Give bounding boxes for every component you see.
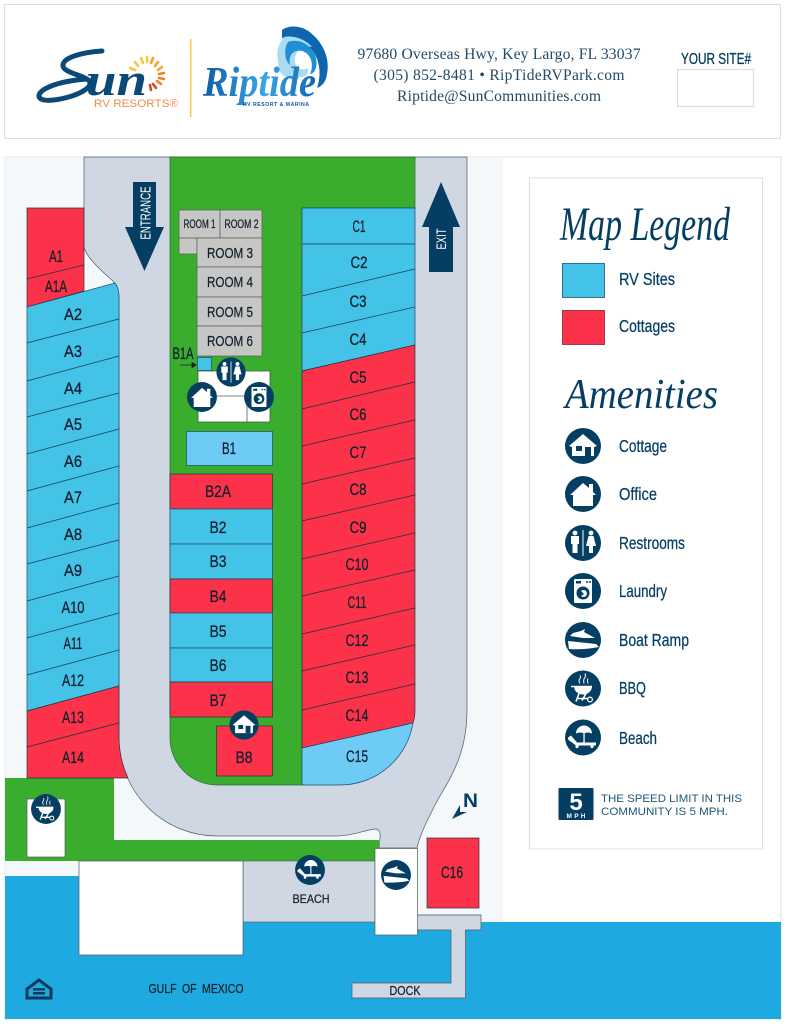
icon: boat ramp [381, 860, 411, 890]
amenity: beach: Beach [619, 728, 657, 748]
site B1A with arrow [172, 344, 212, 370]
site C1: C1 [352, 217, 366, 236]
site C16 [427, 838, 479, 908]
site B7: B7 [210, 691, 226, 710]
site A6 [27, 429, 119, 491]
boat ramp [375, 848, 418, 935]
icon: BBQ [31, 794, 61, 824]
room 1: ROOM 1 [184, 219, 216, 231]
legend panel [530, 178, 762, 849]
site B4 [170, 579, 272, 613]
speed limit notice: 5 [569, 789, 583, 816]
site C10: C10 [346, 555, 368, 574]
site A3 [27, 319, 119, 381]
amenities heading: Amenities [562, 372, 718, 418]
address block: Riptide@SunCommunities.com [397, 88, 601, 105]
amenity: laundry: Laundry [619, 581, 667, 601]
address block: (305) 852-8481 • RipTideRVPark.com [374, 67, 624, 84]
amenity: restrooms: Restrooms [619, 533, 685, 553]
room 6 [197, 326, 262, 356]
speed limit notice: MPH [566, 813, 586, 820]
speed limit notice [558, 788, 742, 820]
green space [5, 157, 415, 861]
site A1A: A1A [45, 277, 67, 296]
site B8 [216, 726, 272, 776]
amenity: BBQ [565, 670, 646, 706]
site B6: B6 [210, 656, 226, 675]
site A13 [27, 686, 119, 747]
site B5 [170, 613, 272, 648]
gulf label: GULF OF MEXICO [148, 982, 244, 996]
site B7 [170, 682, 272, 717]
Sun RV Resorts logo [39, 51, 178, 110]
BBQ area [27, 794, 65, 857]
site C3 [302, 269, 415, 333]
your site number box [678, 51, 754, 106]
site A10 [27, 576, 119, 638]
logo divider [190, 39, 191, 117]
amenity: beach [565, 720, 657, 756]
site C4 [302, 307, 415, 371]
amenity: office [565, 476, 657, 512]
room 6: ROOM 6 [207, 333, 253, 350]
site A9: A9 [64, 561, 82, 580]
room 4 [197, 267, 262, 297]
beach [243, 861, 375, 922]
entrance arrow: ENTRANCE [138, 186, 154, 239]
site C7: C7 [350, 443, 366, 462]
site B6 [170, 648, 272, 682]
section B sites [170, 432, 272, 776]
site A13: A13 [62, 708, 84, 727]
site C2: C2 [350, 253, 368, 272]
speed limit notice: THE SPEED LIMIT IN THIS [601, 793, 742, 805]
icon: cottage on B8 [229, 710, 259, 740]
site B2 [170, 509, 272, 544]
icon: laundry [244, 382, 274, 412]
room 5: ROOM 5 [207, 304, 253, 321]
entrance arrow [125, 182, 164, 271]
site C8 [302, 458, 415, 521]
icon: equal housing [27, 980, 51, 998]
Sun RV Resorts logo: un [86, 54, 147, 105]
road [84, 157, 467, 848]
north arrow [452, 791, 478, 819]
site A10: A10 [62, 598, 84, 617]
site A6: A6 [64, 452, 82, 471]
room 2: ROOM 2 [224, 219, 258, 231]
speed limit notice: COMMUNITY IS 5 MPH. [601, 806, 728, 818]
white lot [79, 861, 243, 955]
legend: cottages: Cottages [619, 316, 675, 336]
site A9 [27, 540, 119, 601]
site A5 [27, 393, 119, 454]
site C5 [302, 345, 415, 409]
site A8: A8 [64, 525, 82, 544]
site C4: C4 [350, 330, 366, 349]
room 2 [220, 210, 262, 238]
site B8: B8 [236, 748, 252, 767]
site B1: B1 [222, 439, 236, 458]
your site number box: YOUR SITE# [681, 51, 751, 68]
amenity: restrooms [565, 525, 685, 561]
site C11 [302, 570, 415, 634]
site C10 [302, 533, 415, 596]
site C7 [302, 420, 415, 484]
room 4: ROOM 4 [207, 274, 253, 291]
section C sites [302, 208, 415, 785]
room 3: ROOM 3 [207, 245, 253, 262]
exit arrow [422, 182, 460, 272]
legend: RV sites [562, 264, 675, 298]
site B1 [186, 432, 272, 466]
Sun RV Resorts logo: RV RESORTS® [94, 98, 178, 110]
site A12 [27, 650, 119, 711]
Riptide logo: RV RESORT & MARINA [243, 102, 309, 108]
exit arrow: EXIT [433, 228, 449, 250]
amenity: cottage: Cottage [619, 436, 667, 456]
site A1 [27, 208, 84, 279]
site B2A [170, 474, 272, 509]
site B3: B3 [210, 552, 226, 571]
section A sites [27, 208, 128, 778]
amenity: boat ramp [565, 622, 689, 658]
site C6: C6 [350, 405, 366, 424]
site C9: C9 [350, 518, 366, 537]
site B2A: B2A [205, 482, 232, 501]
site C15 [302, 723, 413, 785]
icon: restrooms [216, 357, 246, 387]
site A12: A12 [62, 671, 84, 690]
site C14 [302, 684, 415, 748]
room 1 [179, 210, 220, 238]
amenity: BBQ: BBQ [619, 678, 646, 698]
amenity: cottage [565, 428, 667, 464]
water [5, 876, 781, 1019]
site C13 [302, 645, 415, 710]
site A8 [27, 503, 119, 564]
icon: office [187, 382, 217, 412]
site A1A [27, 265, 84, 307]
beach label with icon: BEACH [292, 892, 330, 906]
site A14 [27, 723, 128, 778]
site C6 [302, 382, 415, 446]
site B2: B2 [210, 518, 226, 537]
site B4: B4 [210, 587, 226, 606]
site C11: C11 [348, 593, 366, 612]
site A4: A4 [64, 379, 82, 398]
address block: 97680 Overseas Hwy, Key Largo, FL 33037 [358, 46, 641, 63]
site C9 [302, 495, 415, 559]
site A5: A5 [64, 415, 82, 434]
amenity: office: Office [619, 484, 657, 504]
site A7: A7 [64, 488, 82, 507]
site C14: C14 [346, 706, 368, 725]
Riptide logo [202, 27, 328, 108]
Riptide logo: Riptide [202, 60, 316, 106]
site A4 [27, 356, 119, 417]
room 3 [197, 238, 262, 267]
site B3 [170, 544, 272, 579]
site A1: A1 [49, 247, 63, 266]
site B5: B5 [210, 622, 226, 641]
site C8: C8 [350, 480, 366, 499]
site C15: C15 [346, 747, 368, 766]
legend: cottages [562, 310, 675, 344]
site C2 [302, 244, 415, 296]
site A2: A2 [64, 305, 82, 324]
site C1 [302, 208, 415, 244]
site C12: C12 [346, 631, 368, 650]
office and amenities building [198, 371, 270, 422]
site C16: C16 [441, 863, 463, 882]
site B1A with arrow: B1A [172, 344, 194, 363]
address block [358, 46, 641, 105]
site A7 [27, 466, 119, 528]
room block [179, 210, 262, 356]
site A11: A11 [64, 634, 82, 653]
header panel [4, 4, 780, 138]
site A14: A14 [62, 748, 84, 767]
beach label with icon [292, 855, 330, 906]
site A3: A3 [64, 342, 82, 361]
dock: DOCK [390, 984, 421, 998]
north arrow: N [463, 791, 478, 812]
dock [352, 915, 481, 998]
amenity: laundry [565, 573, 667, 609]
site C3: C3 [350, 292, 366, 311]
site C12 [302, 608, 415, 671]
legend: RV sites: RV Sites [619, 269, 675, 289]
site C13: C13 [346, 668, 368, 687]
site A11 [27, 613, 119, 675]
site A2 [27, 283, 119, 343]
site C5: C5 [350, 368, 366, 387]
amenity: boat ramp: Boat Ramp [619, 630, 689, 650]
room 5 [197, 297, 262, 326]
